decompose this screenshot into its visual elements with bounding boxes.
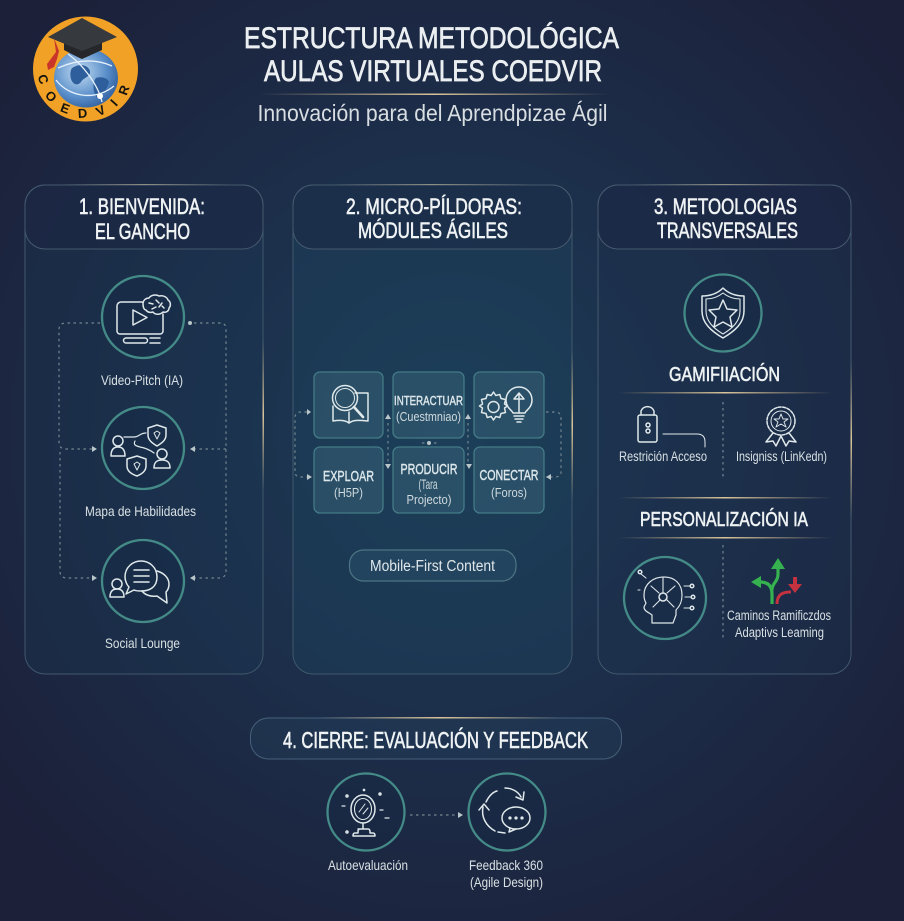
panel 3 heading bbox=[598, 185, 851, 249]
label: Insignias: Insigniss (LinKedn) bbox=[736, 449, 827, 464]
tile: explorar: EXPLOAR bbox=[323, 469, 374, 485]
label: Feedback 360: (Agile Design) bbox=[470, 874, 543, 890]
logo: COEDVIR: COEDVIR bbox=[38, 74, 130, 118]
pill: Mobile-First Content bbox=[350, 550, 516, 581]
icon: lock bbox=[638, 407, 705, 447]
panel 3 heading: TRANSVERSALES bbox=[657, 218, 798, 243]
icon: skills map bbox=[102, 407, 184, 489]
label: Restriccion Acceso: Restrición Acceso bbox=[619, 449, 707, 464]
icon: AI head bbox=[624, 557, 706, 639]
tile: gear and bulb icon bbox=[474, 372, 544, 438]
title: AULAS VIRTUALES COEDVIR bbox=[264, 55, 602, 88]
title bbox=[244, 22, 619, 88]
icon: badge bbox=[766, 407, 796, 446]
label: Video-Pitch: Video-Pitch (IA) bbox=[101, 372, 183, 388]
subtitle: Innovación para del Aprendpizae Ágil bbox=[258, 100, 608, 126]
title: ESTRUCTURA METODOLÓGICA bbox=[244, 22, 619, 55]
tile: explorar bbox=[314, 447, 383, 513]
panel 1 heading bbox=[25, 185, 263, 249]
label: Autoevaluacion: Autoevaluación bbox=[328, 857, 408, 873]
icon: social chat bbox=[102, 540, 184, 622]
arrow: mirror to feedback bbox=[410, 812, 463, 818]
pill: Mobile-First Content: Mobile-First Content bbox=[370, 558, 496, 575]
icon: video pitch with brain bbox=[102, 276, 184, 358]
flow connectors left and right bbox=[59, 321, 226, 581]
icon: shield with star bbox=[684, 274, 762, 352]
label: Mapa de Habilidades: Mapa de Habilidades bbox=[85, 503, 196, 519]
tile: producir: (Tara bbox=[418, 476, 438, 492]
heading pill: cierre: 4. CIERRE: EVALUACIÓN Y FEEDBACK bbox=[283, 727, 588, 753]
tile: conectar: CONECTAR bbox=[480, 468, 538, 484]
logo: COEDVIR bbox=[33, 16, 138, 122]
label: Caminos Ramificados: Caminos Ramificzdos bbox=[727, 608, 831, 623]
panel 2 heading bbox=[293, 185, 572, 249]
icon: feedback loop bbox=[468, 774, 546, 850]
tile: explorar: (H5P) bbox=[334, 485, 363, 500]
label: Feedback 360 bbox=[469, 857, 543, 890]
tile: interactuar bbox=[393, 372, 464, 438]
panel 3: Metodologias transversales bbox=[598, 184, 852, 674]
panel 4: Cierre bbox=[250, 717, 622, 890]
icon: branching paths arrows bbox=[751, 558, 802, 604]
panel 1 heading: EL GANCHO bbox=[95, 219, 190, 244]
panel 2: Micro-pildoras bbox=[293, 184, 573, 674]
tile: interactuar: INTERACTUAR bbox=[394, 393, 463, 408]
panel 2 heading: MÓDULES ÁGILES bbox=[358, 218, 508, 243]
tile: producir: Projecto) bbox=[406, 492, 452, 507]
heading: personalization: PERSONALIZACIÓN IA bbox=[640, 508, 809, 531]
tile: conectar bbox=[474, 447, 544, 513]
flow connectors between tiles bbox=[295, 409, 561, 480]
tile: producir bbox=[393, 447, 464, 513]
label: Adaptive Learning: Adaptivs Leaming bbox=[735, 625, 824, 640]
panel 1 heading: 1. BIENVENIDA: bbox=[79, 194, 205, 219]
panel 2 heading: 2. MICRO-PÍLDORAS: bbox=[346, 194, 522, 219]
tile: producir: PRODUCIR bbox=[400, 462, 458, 478]
icon: mirror bbox=[328, 774, 404, 850]
heading: gamification: GAMIFIIACIÓN bbox=[669, 363, 780, 386]
tile: conectar: (Foros) bbox=[491, 485, 527, 500]
heading pill: cierre bbox=[250, 717, 622, 759]
panel 1: Bienvenida bbox=[25, 184, 264, 674]
label: Social Lounge: Social Lounge bbox=[105, 635, 180, 651]
tile: interactuar: (Cuestmniao) bbox=[396, 409, 461, 424]
panel 3 heading: 3. METOOLOGIAS bbox=[654, 194, 797, 219]
tile: search book icon bbox=[314, 372, 383, 438]
label: Feedback 360: Feedback 360 bbox=[469, 857, 543, 873]
